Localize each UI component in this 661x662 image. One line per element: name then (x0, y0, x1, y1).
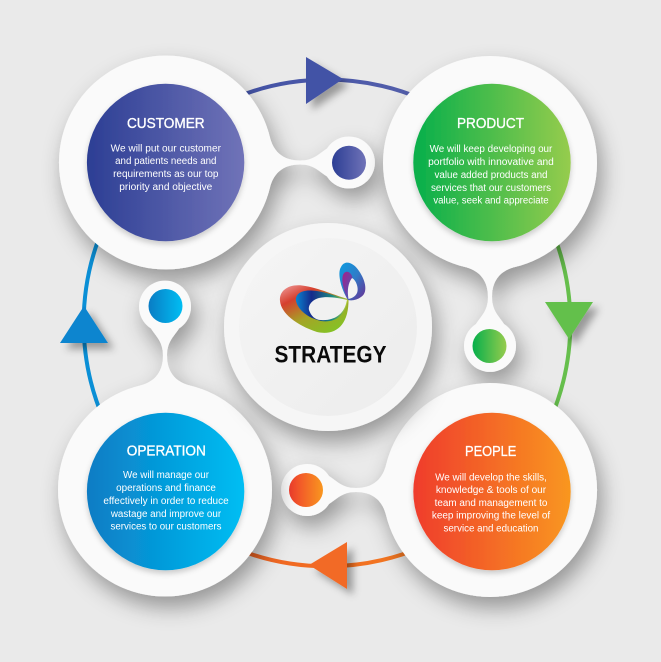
text: people: We will develop the skills, (435, 472, 547, 483)
cycle ring with arrows (60, 57, 593, 589)
text: operation: services to our customers (110, 522, 222, 533)
arc: bottom (155, 495, 499, 566)
connector shape: operation (58, 281, 272, 597)
text: product: We will keep developing our (430, 144, 553, 155)
text: product: value, seek and appreciate (433, 196, 549, 207)
panel: center strategy (224, 223, 432, 431)
panel: product (383, 56, 597, 372)
arrow: left (60, 306, 108, 343)
text: product: portfolio with innovative and (428, 157, 554, 168)
text: customer (111, 143, 222, 193)
heading: product: PRODUCT (457, 115, 524, 132)
heading: people: PEOPLE (465, 443, 516, 460)
connector shape: product (383, 56, 597, 372)
panel: people (281, 383, 597, 597)
arc: left (84, 151, 155, 495)
center outer circle (224, 223, 432, 431)
text: product: value added products and (434, 170, 548, 181)
text: customer: priority and objective (119, 182, 213, 193)
connector shape: people (281, 383, 597, 597)
text: customer: requirements as our top (113, 169, 219, 180)
dot: customer (332, 146, 366, 180)
circle: operation (87, 413, 244, 570)
arc: top (155, 80, 499, 151)
text: operation: effectively in order to reduce (103, 496, 229, 507)
heading: customer: CUSTOMER (127, 115, 205, 132)
circle: customer (87, 84, 244, 241)
text: operation: We will manage our (123, 470, 210, 481)
connector shape: customer (59, 56, 375, 270)
panel: customer (59, 56, 375, 270)
text: people (432, 472, 550, 534)
heading: operation: OPERATION (127, 442, 206, 459)
heading: strategy: STRATEGY (274, 342, 386, 369)
center inner circle (239, 238, 417, 416)
text: product (428, 144, 554, 207)
text: customer: We will put our customer (111, 143, 222, 154)
circle: people (413, 413, 571, 570)
text: operation: operations and finance (116, 483, 216, 494)
icon: strategy logo (280, 263, 365, 333)
dot: people (289, 473, 323, 507)
text: people: knowledge & tools of our (436, 485, 547, 496)
arrow: top (306, 57, 343, 104)
arc: right (499, 151, 570, 495)
text: operation (103, 470, 229, 533)
circle: product (413, 84, 571, 241)
text: customer: and patients needs and (115, 156, 216, 167)
text: people: service and education (444, 523, 538, 534)
dot: operation (148, 289, 182, 323)
panel: operation (58, 281, 272, 597)
text: product: services that our customers (431, 183, 551, 194)
arrow: right (545, 302, 593, 339)
text: people: team and management to (435, 498, 548, 509)
text: operation: wastage and improve our (110, 509, 222, 520)
dot: product (472, 329, 506, 363)
text: people: keep improving the level of (432, 511, 550, 522)
arrow: bottom (309, 542, 347, 589)
